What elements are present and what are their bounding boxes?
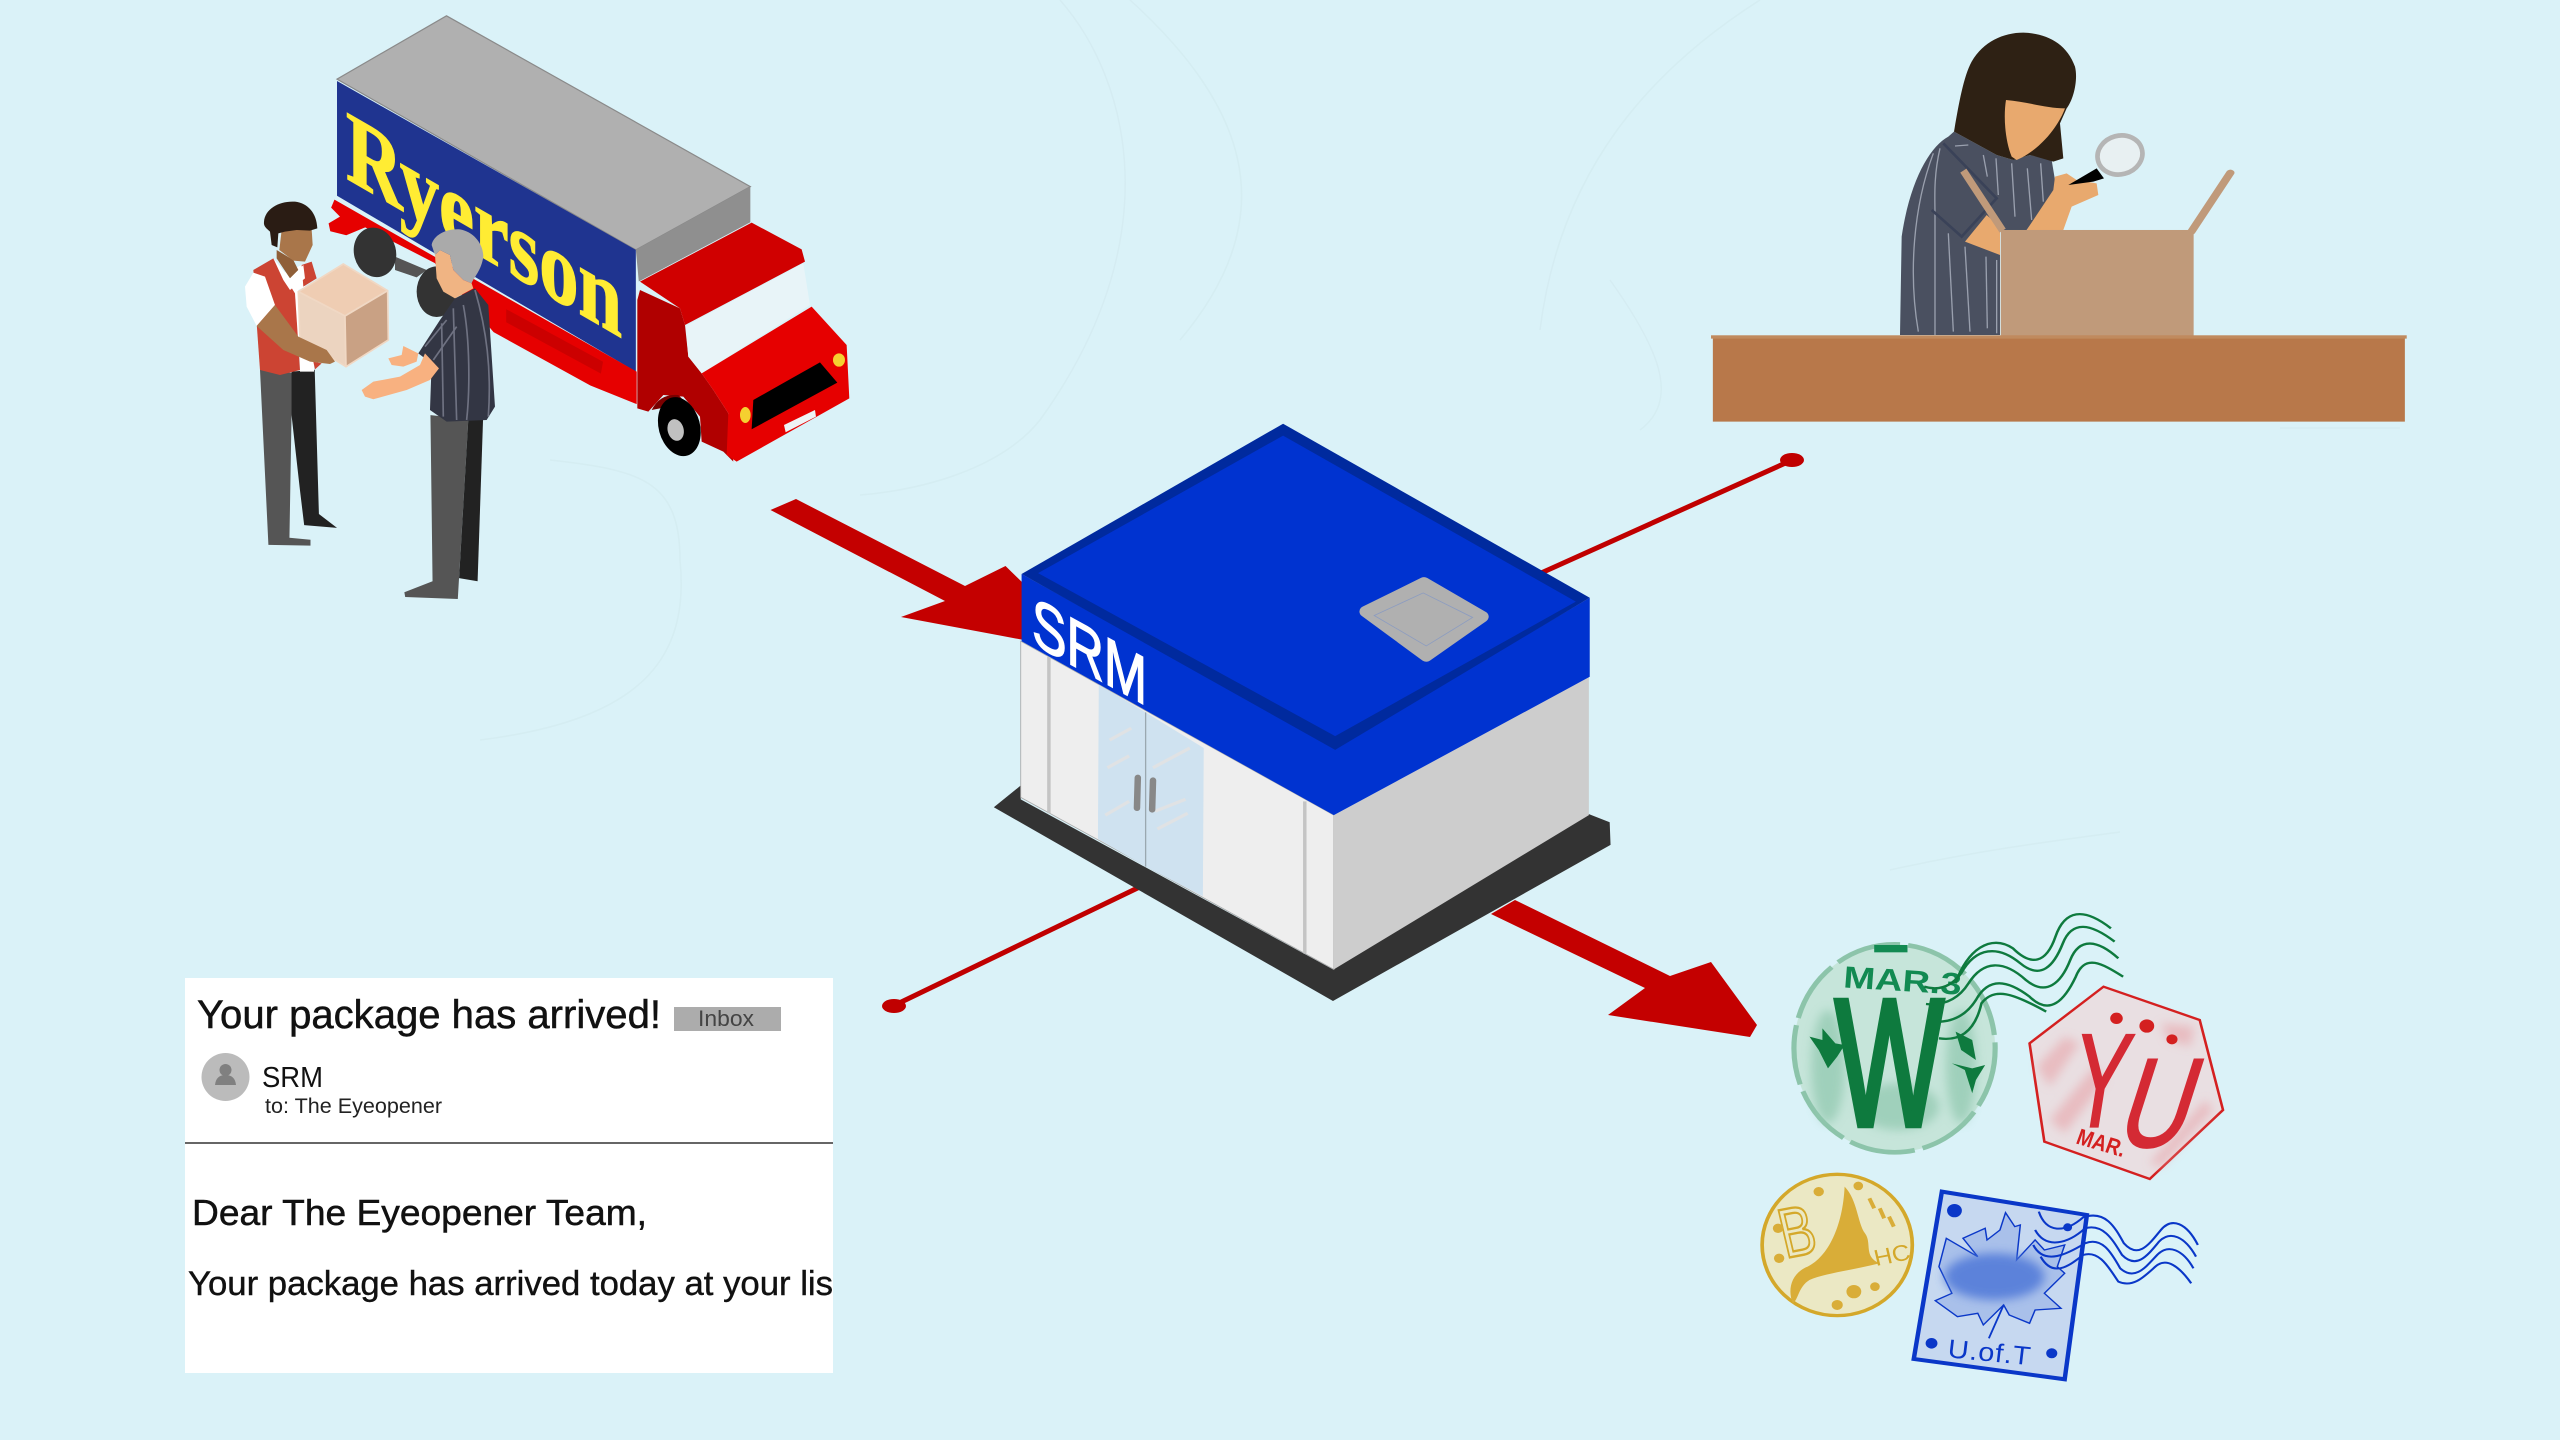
- stamp: green W: [1794, 914, 2123, 1164]
- stamp: red YU: MAR.: [2073, 1124, 2129, 1163]
- stamp: gold coin: HC: [1871, 1240, 1913, 1272]
- customer legs: [404, 415, 483, 599]
- stamp: gold coin: B: [1771, 1190, 1823, 1273]
- cardboard box: [2001, 173, 2230, 336]
- email subject: Your package has arrived!: [197, 993, 661, 1037]
- box and desk: [1711, 173, 2407, 422]
- glass doors: [1098, 685, 1204, 896]
- arrow: truck to SRM: [770, 499, 1024, 640]
- delivery person legs: [260, 370, 337, 546]
- message body: Your package has arrived today at your lis: [188, 1265, 833, 1303]
- magnifying glass: [2068, 130, 2147, 185]
- desk: [1711, 335, 2407, 422]
- stamps: [1762, 914, 2223, 1379]
- roof hatch: [1366, 583, 1483, 656]
- truck cargo box and chassis: [329, 16, 750, 404]
- sender name: SRM: [262, 1062, 323, 1094]
- delivery person upper body: [245, 202, 388, 375]
- stamp: green W: W: [1835, 963, 1943, 1164]
- SRM sign: SRM: [1032, 582, 1147, 721]
- rear wheels: [348, 223, 457, 317]
- truck lettering: Ryerson: [346, 90, 622, 360]
- inspector opening box at desk: [1711, 33, 2407, 422]
- arrow: SRM to stamps: [1491, 900, 1757, 1037]
- SRM building: [994, 424, 1611, 1001]
- delivery truck: [329, 16, 849, 462]
- sender avatar: [202, 1053, 250, 1101]
- truck cab: [637, 223, 849, 462]
- greeting: Dear The Eyeopener Team,: [192, 1192, 647, 1233]
- customer with grey hair: [362, 229, 495, 599]
- inspector figure: [1900, 33, 2147, 335]
- stamp: red YU: [2030, 987, 2223, 1179]
- stamp: red YU: Y: [2062, 1007, 2141, 1156]
- stamp: blue maple leaf: U.of.T: [1946, 1334, 2034, 1371]
- stamp: blue maple leaf: [1914, 1192, 2198, 1379]
- inbox badge: Inbox: [698, 1006, 754, 1031]
- inbox badge: [674, 1006, 781, 1031]
- arrow: thin line from SRM to inspector: [1530, 453, 1804, 578]
- recipient: to: The Eyeopener: [265, 1095, 442, 1118]
- package being handed over: [298, 264, 388, 367]
- stamp: red YU: U: [2104, 1032, 2220, 1173]
- delivery person holding box: [245, 202, 388, 546]
- hair and face: [1954, 33, 2076, 162]
- customer upper body: [362, 229, 495, 422]
- stamp: green W: MAR.3: [1842, 960, 1963, 1001]
- stamp: gold coin: [1762, 1174, 1913, 1316]
- arrow: thin line from email to SRM: [882, 882, 1150, 1013]
- email panel: [185, 978, 833, 1373]
